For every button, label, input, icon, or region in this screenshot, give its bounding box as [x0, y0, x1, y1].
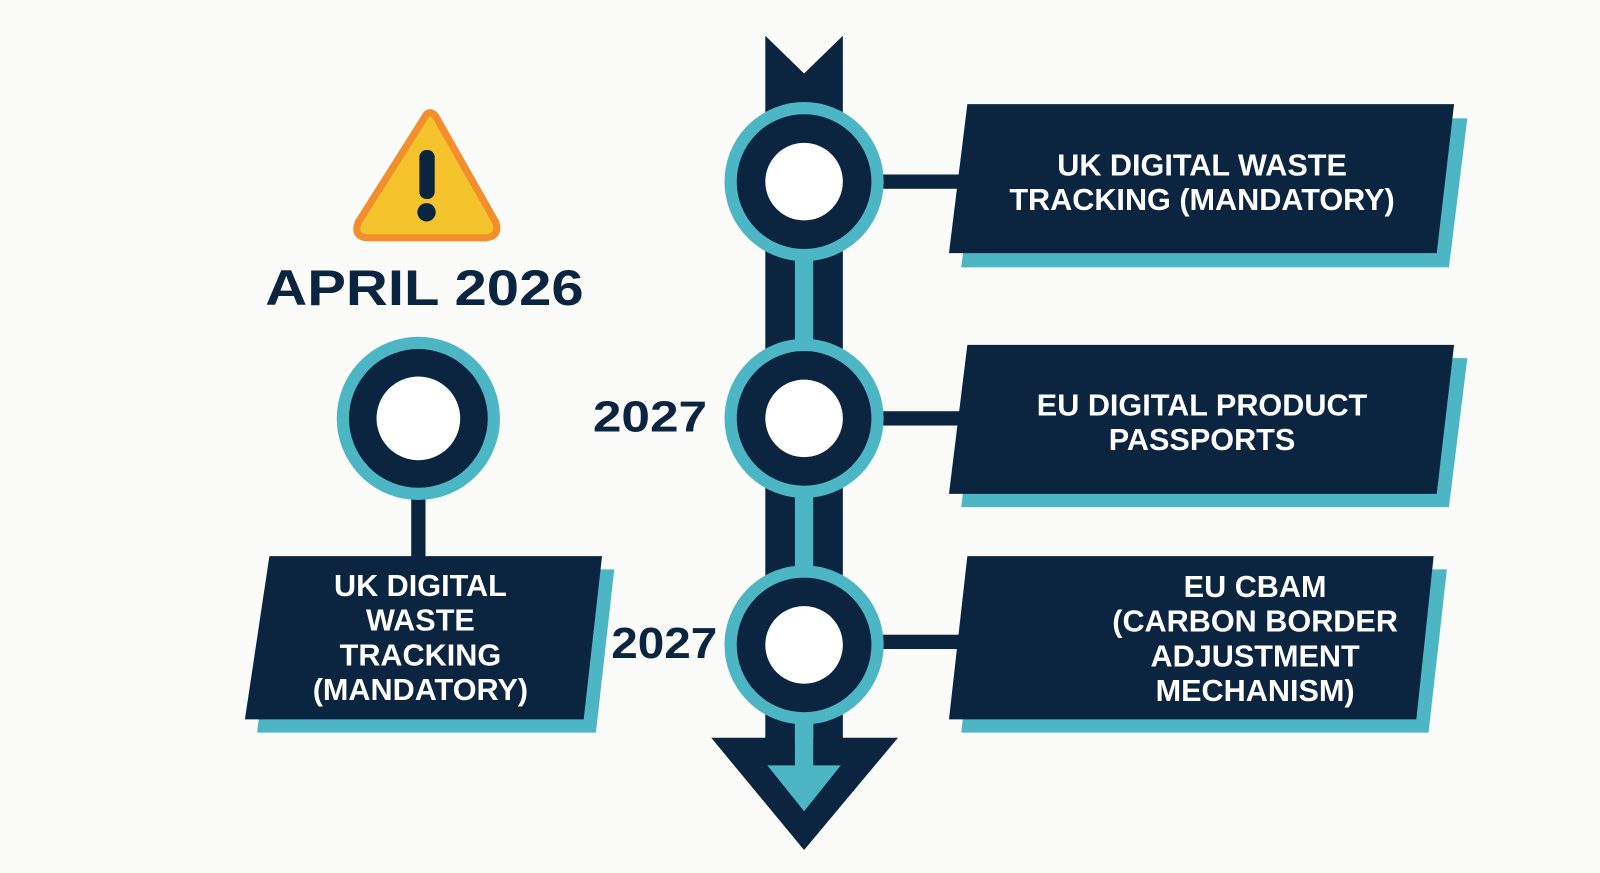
box: UK digital waste tracking (right): UK DIGITAL WASTE [1057, 149, 1347, 183]
timeline spine [765, 36, 843, 765]
node: 2026 [731, 108, 878, 255]
node: 2027 product passports [731, 345, 878, 492]
box: UK digital waste tracking (left): UK DIGITAL [334, 569, 507, 603]
node: left april 2026 [343, 343, 494, 494]
heading: april 2026: APRIL 2026 [265, 260, 584, 316]
box: EU CBAM: (CARBON BORDER [1112, 605, 1398, 639]
connectors [411, 174, 964, 649]
box: EU digital product passports [949, 345, 1467, 507]
box: UK digital waste tracking (left): TRACKING [340, 638, 501, 672]
box: EU CBAM: EU CBAM [1184, 570, 1327, 604]
box: EU digital product passports: EU DIGITAL PRODUCT [1037, 388, 1368, 422]
box: EU CBAM [949, 556, 1447, 733]
box: UK digital waste tracking (right) [949, 104, 1467, 267]
arrow: timeline end [711, 714, 898, 850]
label: 2027: 2027 [593, 393, 707, 442]
box: UK digital waste tracking (left): WASTE [366, 604, 475, 638]
label: 2027: 2027 [611, 619, 717, 668]
box: EU CBAM: MECHANISM) [1156, 674, 1355, 708]
box: EU CBAM: ADJUSTMENT [1151, 639, 1360, 673]
box: UK digital waste tracking (right): TRACKING (MANDATORY) [1009, 183, 1395, 217]
box: UK digital waste tracking (left) [245, 556, 614, 733]
node: 2027 CBAM [731, 571, 878, 718]
box: EU digital product passports: PASSPORTS [1109, 423, 1295, 457]
icon: warning [357, 113, 497, 238]
box: UK digital waste tracking (left): (MANDATORY) [313, 673, 528, 707]
